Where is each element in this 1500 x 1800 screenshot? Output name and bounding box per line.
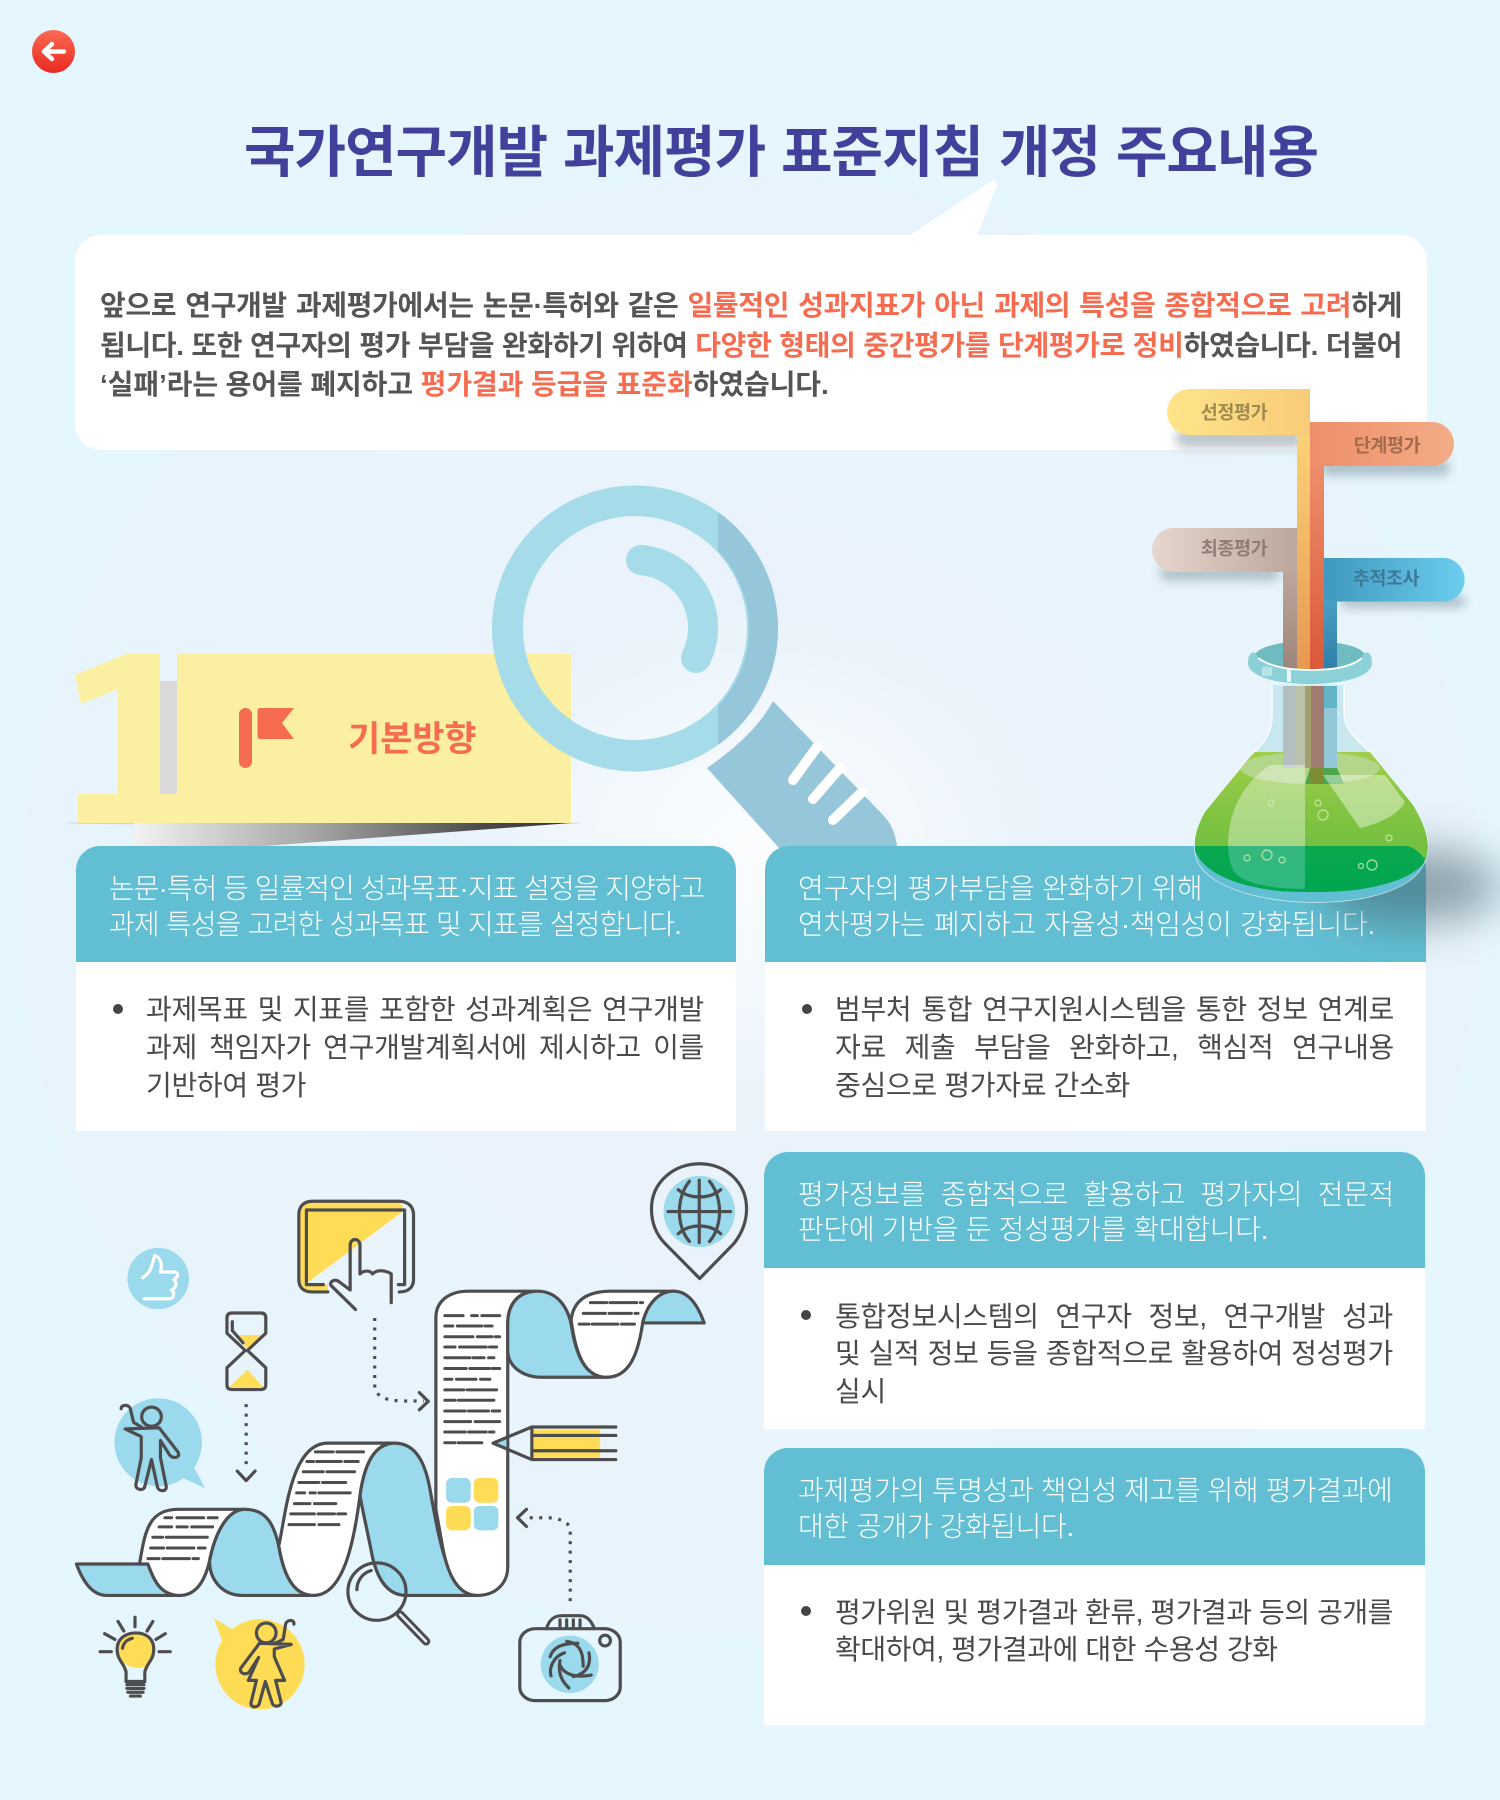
body line 2: 확대하여, 평가결과에 대한 수용성 강화 — [835, 1634, 1278, 1665]
arrow: hourglass down — [237, 1404, 255, 1481]
body line 1: 통합정보시스템의 연구자 정보, 연구개발 성과 — [835, 1301, 1393, 1332]
signpost: 선정평가 — [1167, 389, 1310, 670]
signpost: 최종평가 — [1152, 528, 1297, 670]
signpost: 추적조사: 추적조사 — [1353, 568, 1420, 589]
signpost: 추적조사 — [1324, 558, 1465, 670]
icon: large magnifying glass — [492, 486, 898, 860]
body line 1: 범부처 통합 연구지원시스템을 통한 정보 연계로 — [835, 994, 1394, 1025]
body line 3: 실시 — [835, 1376, 886, 1407]
signpost shadows — [1160, 428, 1465, 608]
bullet — [801, 1310, 811, 1320]
section number block: 1 기본방향 — [66, 654, 582, 847]
speech bubble tail — [909, 180, 997, 236]
heading line 2: 대한 공개가 강화됩니다. — [798, 1511, 1074, 1542]
signpost: 단계평가 — [1310, 422, 1454, 670]
icon: pencil — [493, 1427, 616, 1460]
heading line 2: 연차평가는 폐지하고 자율성·책임성이 강화됩니다. — [798, 909, 1375, 940]
illustration: document ribbon with icons — [77, 1164, 747, 1709]
icon: back arrow button — [32, 30, 75, 73]
flask — [1194, 683, 1428, 903]
signpost: 선정평가: 선정평가 — [1201, 402, 1268, 423]
icon: person in blue bubble — [114, 1398, 205, 1491]
heading: 평가부담: 연구자의 평가부담을 완화하기 위해 — [798, 873, 1202, 904]
icon: person in yellow bubble — [214, 1618, 305, 1709]
intro line 1: 앞으로 연구개발 과제평가에서는 논문·특허와 같은 일률적인 성과지표가 아닌 과제의 특성을 종합적으로 고려하게 — [100, 290, 1402, 321]
document ribbon — [77, 1291, 704, 1595]
body line 2: 자료 제출 부담을 완화하고, 핵심적 연구내용 — [835, 1032, 1394, 1063]
intro line 3: ‘실패’라는 용어를 폐지하고 평가결과 등급을 표준화하였습니다. — [100, 369, 829, 400]
icon: lightbulb — [100, 1617, 170, 1696]
heading: 성과목표: 논문·특허 등 일률적인 성과목표·지표 설정을 지양하고 — [109, 873, 704, 904]
signpost: 단계평가: 단계평가 — [1354, 435, 1421, 456]
heading line 2: 과제 특성을 고려한 성과목표 및 지표를 설정합니다. — [109, 909, 681, 940]
panel: intro speech bubble — [75, 235, 1427, 450]
flask drop shadow — [1322, 848, 1500, 924]
icon: thumbs up — [127, 1248, 189, 1309]
flask rim back — [1248, 641, 1372, 684]
arrow: camera to document — [518, 1509, 570, 1601]
heading: 정성평가: 평가정보를 종합적으로 활용하고 평가자의 전문적 — [798, 1179, 1394, 1210]
icon: small magnifier — [348, 1563, 426, 1641]
panel: 평가부담 완화 — [765, 846, 1426, 1131]
icon: camera — [520, 1616, 620, 1701]
bullet — [801, 1606, 811, 1616]
intro line 2: 됩니다. 또한 연구자의 평가 부담을 완화하기 위하여 다양한 형태의 중간평가를 단계평가로 정비하였습니다. 더불어 — [100, 330, 1402, 361]
heading line 2: 판단에 기반을 둔 정성평가를 확대합니다. — [798, 1214, 1268, 1245]
text label: 기본방향: 기본방향 — [348, 720, 476, 759]
panel: 정성평가 확대 — [764, 1152, 1425, 1429]
icon: flag — [239, 708, 294, 768]
icon: hourglass — [227, 1313, 266, 1390]
signpost: 최종평가: 최종평가 — [1201, 538, 1268, 559]
icon: touch tablet — [299, 1201, 414, 1310]
bullet — [802, 1004, 812, 1014]
body line 1: 과제목표 및 지표를 포함한 성과계획은 연구개발 — [146, 994, 704, 1025]
flask rim front — [1248, 653, 1372, 684]
body line 1: 평가위원 및 평가결과 환류, 평가결과 등의 공개를 — [835, 1597, 1393, 1628]
body line 3: 중심으로 평가자료 간소화 — [835, 1070, 1130, 1101]
heading: 공개 강화: 과제평가의 투명성과 책임성 제고를 위해 평가결과에 — [798, 1475, 1392, 1506]
arrow: tablet to document — [375, 1318, 428, 1410]
panel: 성과목표 및 지표 — [76, 846, 736, 1131]
body line 2: 과제 책임자가 연구개발계획서에 제시하고 이를 — [146, 1032, 704, 1063]
icon: globe pin — [651, 1164, 747, 1279]
title: 국가연구개발 과제평가 표준지침 개정 주요내용 — [244, 121, 1318, 184]
panel: 평가결과 공개 — [764, 1448, 1425, 1725]
bullet — [113, 1004, 123, 1014]
body line 3: 기반하여 평가 — [146, 1070, 306, 1101]
body line 2: 및 실적 정보 등을 종합적으로 활용하여 정성평가 — [835, 1338, 1393, 1369]
